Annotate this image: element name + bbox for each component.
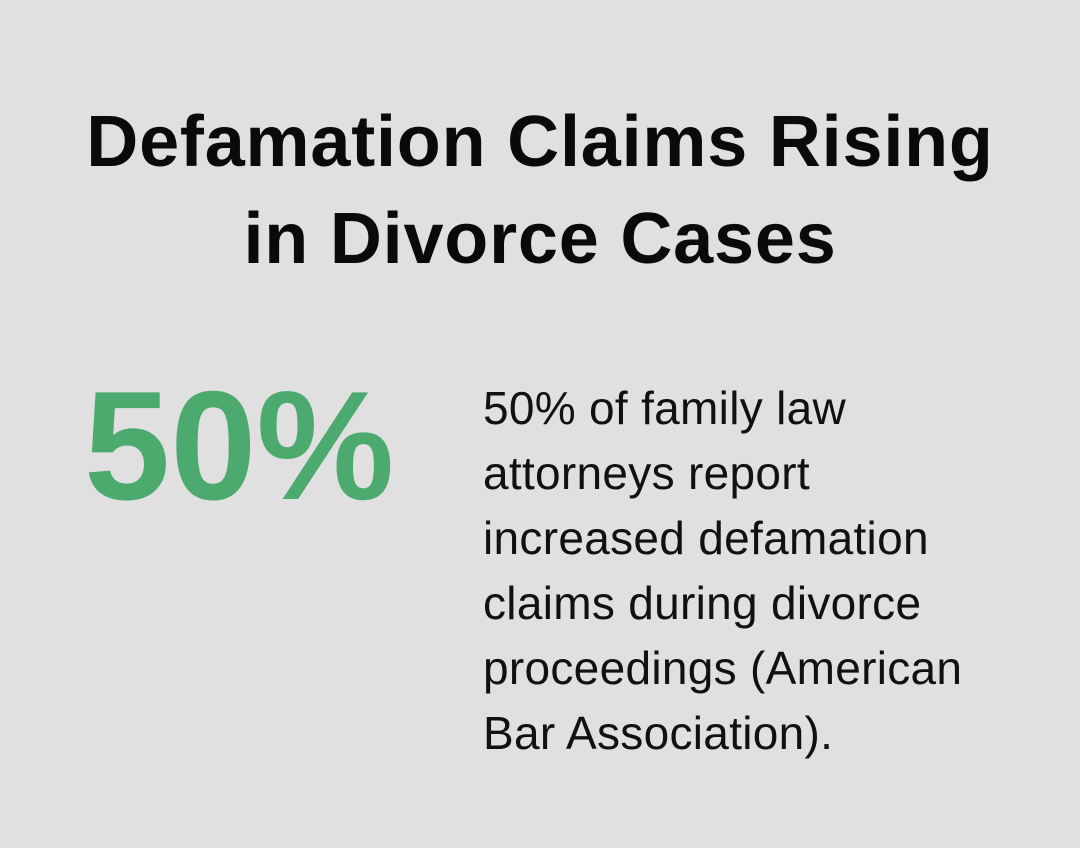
- description text: increased defamation: [483, 512, 929, 564]
- title: [86, 102, 994, 279]
- description text: proceedings (American: [483, 642, 962, 694]
- title: Defamation Claims Rising: [86, 102, 994, 182]
- description text: Bar Association).: [483, 707, 833, 759]
- description text: attorneys report: [483, 447, 810, 499]
- big statistic: 50%: 50%: [84, 359, 394, 532]
- description text: claims during divorce: [483, 577, 921, 629]
- description text: [483, 382, 962, 759]
- title: in Divorce Cases: [243, 199, 837, 279]
- description text: 50% of family law: [483, 382, 846, 434]
